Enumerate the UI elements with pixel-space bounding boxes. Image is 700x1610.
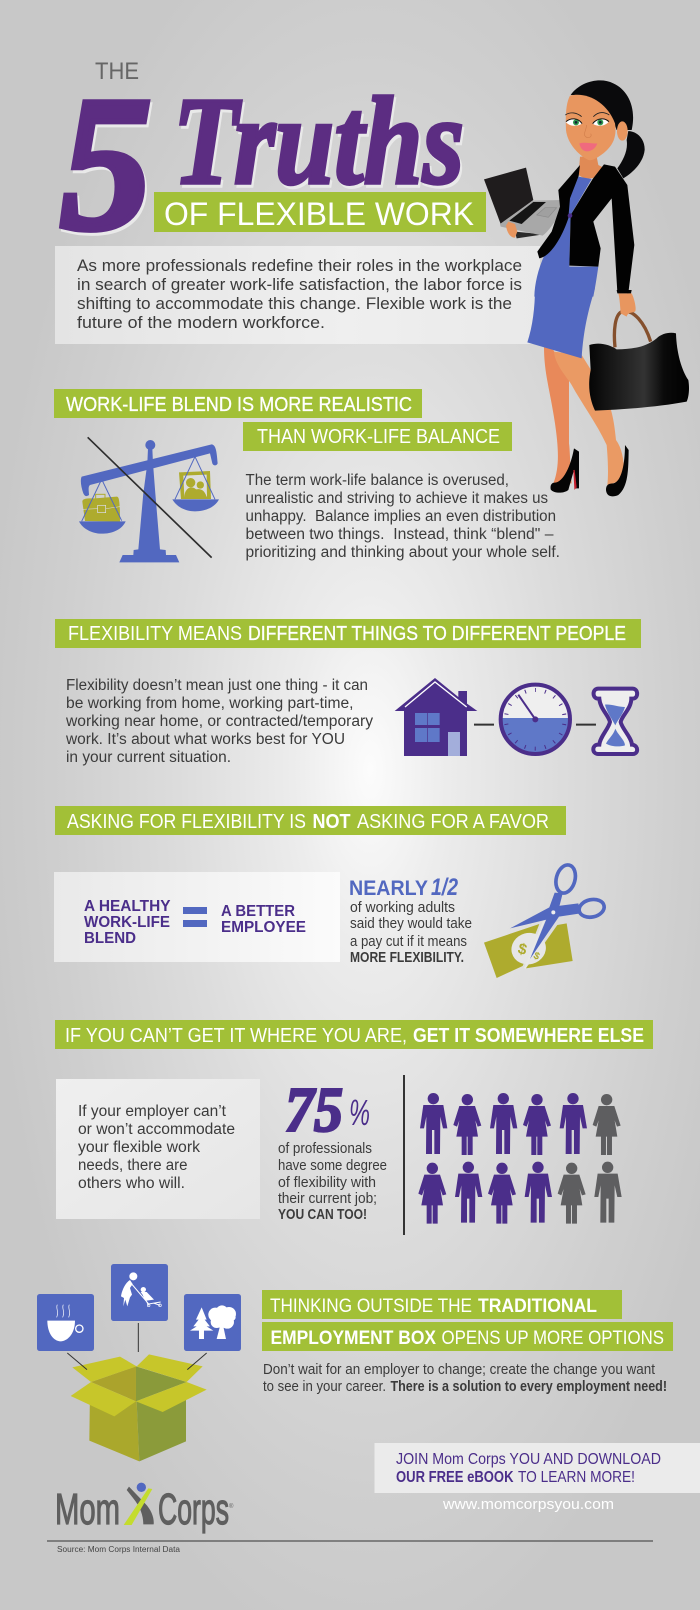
panel: healthy blend equals better employee: BLEND [84,930,136,947]
section 4 heading: get it somewhere else: GET IT SOMEWHERE ELSE [413,1025,644,1047]
icon: scissors cutting money: $ [516,940,529,959]
panel: intro: shifting to accommodate this change. Flexible work is the [77,295,512,313]
stat: nearly one half: said they would take [350,916,472,932]
website url: www.momcorpsyou.com [442,1496,614,1513]
stat: 75 percent: their current job; [278,1191,377,1207]
divider line [403,1075,405,1235]
panel: intro: As more professionals redefine their roles in the workplace [77,257,522,275]
stat: 75 percent: of flexibility with [278,1175,376,1191]
section 5 heading: thinking outside the box: THINKING OUTSIDE THE [270,1296,472,1317]
stat: 75 percent: 75 [285,1074,343,1145]
icon: crossed-out balance scale [79,437,219,562]
icon: scissors cutting money: $ [532,950,542,963]
logo: Mom Corps: Corps [158,1485,229,1534]
section 5 heading: thinking outside the box [262,1290,673,1351]
title: Truths: Truths [175,76,466,214]
illustration: businesswoman with laptop and handbag [484,80,689,496]
box [71,1354,207,1461]
panel: healthy blend equals better employee [54,872,340,962]
stat: nearly one half [349,874,472,966]
section 2 heading: flexibility means different things: DIFFERENT THINGS TO DIFFERENT PEOPLE [248,623,626,645]
icon: equals sign [183,907,207,927]
stat: 75 percent: YOU CAN TOO! [278,1207,367,1223]
panel: other employers: or won’t accommodate [78,1121,235,1138]
callout: download ebook: OUR FREE eBOOK [396,1469,514,1486]
text: work-life balance explanation: prioritizing and thinking about your whole self. [246,544,560,561]
panel: intro [55,246,540,344]
stat: 75 percent: % [349,1092,370,1133]
text: create the change: Don’t wait for an employer to change; create the change you want [263,1362,655,1378]
legs, dress hem and handbag [527,288,689,496]
section 5 heading: thinking outside the box: OPENS UP MORE OPTIONS [442,1328,664,1349]
callout: download ebook [374,1443,700,1493]
section 3 heading: asking for flexibility: NOT [312,811,350,833]
stat: 75 percent: have some degree [278,1158,387,1174]
title: THE: THE [95,58,139,85]
panel: intro: future of the modern workforce. [77,314,325,332]
panel: other employers: needs, there are [78,1157,188,1174]
text: flexibility explanation: working near home, or contracted/temporary [65,713,373,730]
stat: nearly one half: of working adults [350,900,455,916]
source note: Source: Mom Corps Internal Data [57,1545,181,1554]
text: create the change: to see in your career. [263,1379,386,1395]
stat: nearly one half: a pay cut if it means [350,934,467,950]
section 3 heading: asking for flexibility: ASKING FOR FLEXIBILITY IS [67,811,306,833]
title banner: of flexible work: OF FLEXIBLE WORK [164,196,474,232]
icon: scissors cutting money [484,863,606,978]
title block [60,57,486,273]
stat: nearly one half: MORE FLEXIBILITY. [350,950,464,966]
text: flexibility explanation [65,677,373,766]
pictogram: 12 people, 9 of 12 purple [418,1093,622,1224]
connector dash [576,722,596,728]
connector lines [67,1323,207,1370]
panel: other employers: others who will. [78,1175,185,1192]
panel: other employers [56,1079,260,1219]
text: work-life balance explanation [246,472,560,561]
icon: parent with stroller [111,1264,168,1321]
panel: healthy blend equals better employee: A BETTER [221,903,295,920]
icon: house [395,678,477,756]
text: work-life balance explanation: unrealistic and striving to achieve it makes us [246,490,548,507]
upper body: head, hair, blazer [534,80,645,297]
text: flexibility explanation: Flexibility doesn’t mean just one thing - it can [66,677,368,694]
text: work-life balance explanation: between two things. Instead, think “blend" – [246,526,554,543]
title: big numeral 5: 5 [60,57,152,270]
section 5 heading: thinking outside the box: TRADITIONAL [478,1296,597,1317]
panel: intro: in search of greater work-life satisfaction, the labor force is [77,276,522,294]
icon: clock [501,685,570,754]
text: flexibility explanation: be working from home, working part-time, [66,695,354,712]
icon: trees [184,1294,241,1351]
section 3 heading: asking for flexibility [55,806,566,835]
text: flexibility explanation: in your current situation. [66,749,231,766]
stat: nearly one half: 1/2 [431,874,459,901]
callout: download ebook: JOIN Mom Corps YOU AND DOWNLOAD [396,1451,661,1468]
panel: healthy blend equals better employee: EMPLOYEE [221,919,306,936]
section 1 heading: work-life blend: WORK-LIFE BLEND IS MORE REALISTIC [66,394,412,416]
icon: hourglass [593,689,637,754]
section 1 heading: work-life blend: THAN WORK-LIFE BALANCE [257,426,500,448]
text: work-life balance explanation: unhappy. Balance implies an even distribution [246,508,556,525]
section 3 heading: asking for flexibility: ASKING FOR A FAVOR [357,811,549,833]
logo: Mom Corps: Mom [55,1485,120,1534]
section 4 heading: get it somewhere else: IF YOU CAN’T GET IT WHERE YOU ARE, [65,1025,407,1047]
stat: 75 percent [278,1074,387,1223]
stat: nearly one half: NEARLY [349,877,428,900]
connector dash [474,722,494,728]
text: work-life balance explanation: The term work-life balance is overused, [246,472,509,489]
panel: healthy blend equals better employee: A HEALTHY [84,898,171,915]
logo: Mom Corps [55,1483,234,1534]
text: create the change [263,1362,667,1395]
section 1 heading: work-life blend [54,389,512,451]
text: flexibility explanation: work. It’s about what works best for YOU [65,731,345,748]
footer rule [47,1540,653,1542]
section 2 heading: flexibility means different things: FLEXIBILITY MEANS [68,623,242,645]
laptop [484,168,562,238]
panel: healthy blend equals better employee: WORK-LIFE [84,914,170,931]
icons: house, clock, hourglass [395,678,637,756]
title: big numeral 5: 5 [62,60,154,273]
callout: download ebook: TO LEARN MORE! [518,1469,635,1486]
section 5 heading: thinking outside the box: EMPLOYMENT BOX [270,1328,436,1349]
section 4 heading: get it somewhere else [55,1020,653,1049]
panel: other employers: If your employer can’t [78,1103,227,1120]
title: Truths: Truths [173,73,464,211]
icon: coffee cup [37,1294,94,1351]
panel: other employers: your flexible work [78,1139,200,1156]
illustration: open box with icons [37,1264,241,1461]
stat: 75 percent: of professionals [278,1141,372,1157]
logo: Mom Corps: ® [229,1503,234,1510]
section 2 heading: flexibility means different things [55,619,641,648]
